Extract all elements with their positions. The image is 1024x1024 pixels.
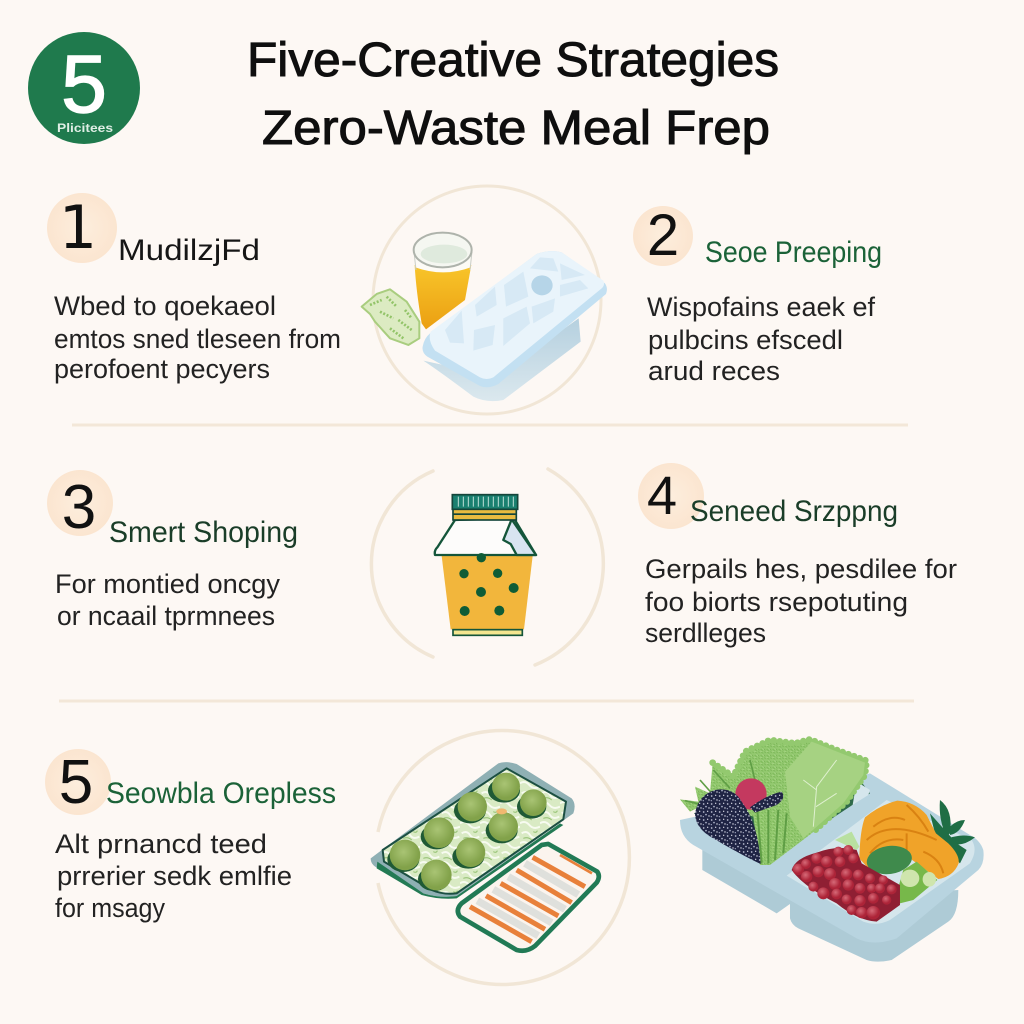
body text 2: Wispofains eaek ef: [647, 292, 875, 322]
panel: strategy 3: [47, 470, 298, 631]
number badge 1: [47, 193, 117, 263]
pomegranate seeds: [792, 845, 900, 922]
body text 5: Alt prnancd teed: [55, 829, 267, 859]
number badge 5: [45, 748, 111, 817]
orange slices: [859, 800, 975, 879]
heading 2: Seoe Preeping: [705, 236, 882, 269]
body text 3: For montied oncgy: [55, 569, 281, 599]
heading 4: Seneed Srzppng: [690, 495, 898, 528]
icon: tray with carrot stripes: [458, 844, 599, 951]
box base: [702, 850, 958, 962]
icon: jar: [435, 495, 536, 635]
dark berries: [695, 789, 761, 864]
body text 1: [54, 291, 341, 384]
lettuce: [680, 739, 867, 865]
body text 4: foo biorts rsepotuting: [645, 587, 908, 617]
illustration: trays in circle: [371, 730, 629, 985]
number badge 4: 4: [647, 466, 677, 526]
right compartment: [787, 800, 975, 924]
icon: tray with green balls: [371, 762, 575, 899]
box rim: [680, 773, 984, 942]
panel: strategy 5: [45, 748, 336, 923]
heading 1: MudilzjFd: [118, 234, 260, 267]
body text 5: for msagy: [55, 893, 165, 923]
top badge: 5: [61, 39, 107, 130]
title: Five-Creative Strategies: [247, 34, 779, 87]
body text 3: or ncaail tprmnees: [57, 601, 275, 631]
body text 1: emtos sned tleseen from: [54, 324, 341, 354]
number badge 5: 5: [59, 748, 93, 817]
illustration: lunch box with vegetables: [680, 739, 984, 962]
body text 1: Wbed to qoekaeol: [54, 291, 276, 321]
number badge 2: [633, 203, 693, 268]
number badge 3: 3: [62, 473, 96, 542]
number badge 3: [47, 470, 113, 542]
number badge 2: 2: [647, 203, 679, 268]
body text 2: [647, 292, 875, 386]
body text 5: [55, 829, 292, 923]
illustration: ice tray, juice glass and lime in circle: [362, 186, 607, 414]
heading 3: Smert Shoping: [109, 516, 298, 549]
body text 4: serdlleges: [645, 618, 766, 648]
top badge: [28, 32, 140, 144]
title: [247, 34, 779, 155]
panel: strategy 4: [638, 463, 957, 648]
body text 4: Gerpails hes, pesdilee for: [645, 554, 957, 584]
icon: lime chunk: [362, 289, 419, 345]
panel: strategy 1: [47, 193, 341, 384]
icon: juice glass: [414, 233, 472, 329]
top badge: Plicitees: [57, 121, 113, 135]
body text 2: pulbcins efscedl: [648, 325, 843, 355]
icon: ice tray: [423, 251, 607, 401]
body text 4: [645, 554, 957, 648]
heading 5: Seowbla Orepless: [106, 777, 336, 810]
body text 2: arud reces: [648, 356, 780, 386]
body text 5: prrerier sedk emlfie: [57, 861, 292, 891]
body text 3: [55, 569, 281, 631]
left compartment: [694, 763, 870, 865]
title: Zero-Waste Meal Frep: [262, 102, 770, 155]
green vegetables: [835, 832, 937, 905]
panel: strategy 2: [633, 203, 882, 386]
radish: [735, 778, 767, 810]
body text 1: perofoent pecyers: [54, 354, 270, 384]
illustration: jar in circle arcs: [371, 469, 603, 665]
number badge 1: 1: [59, 193, 97, 263]
number badge 4: [638, 463, 704, 529]
